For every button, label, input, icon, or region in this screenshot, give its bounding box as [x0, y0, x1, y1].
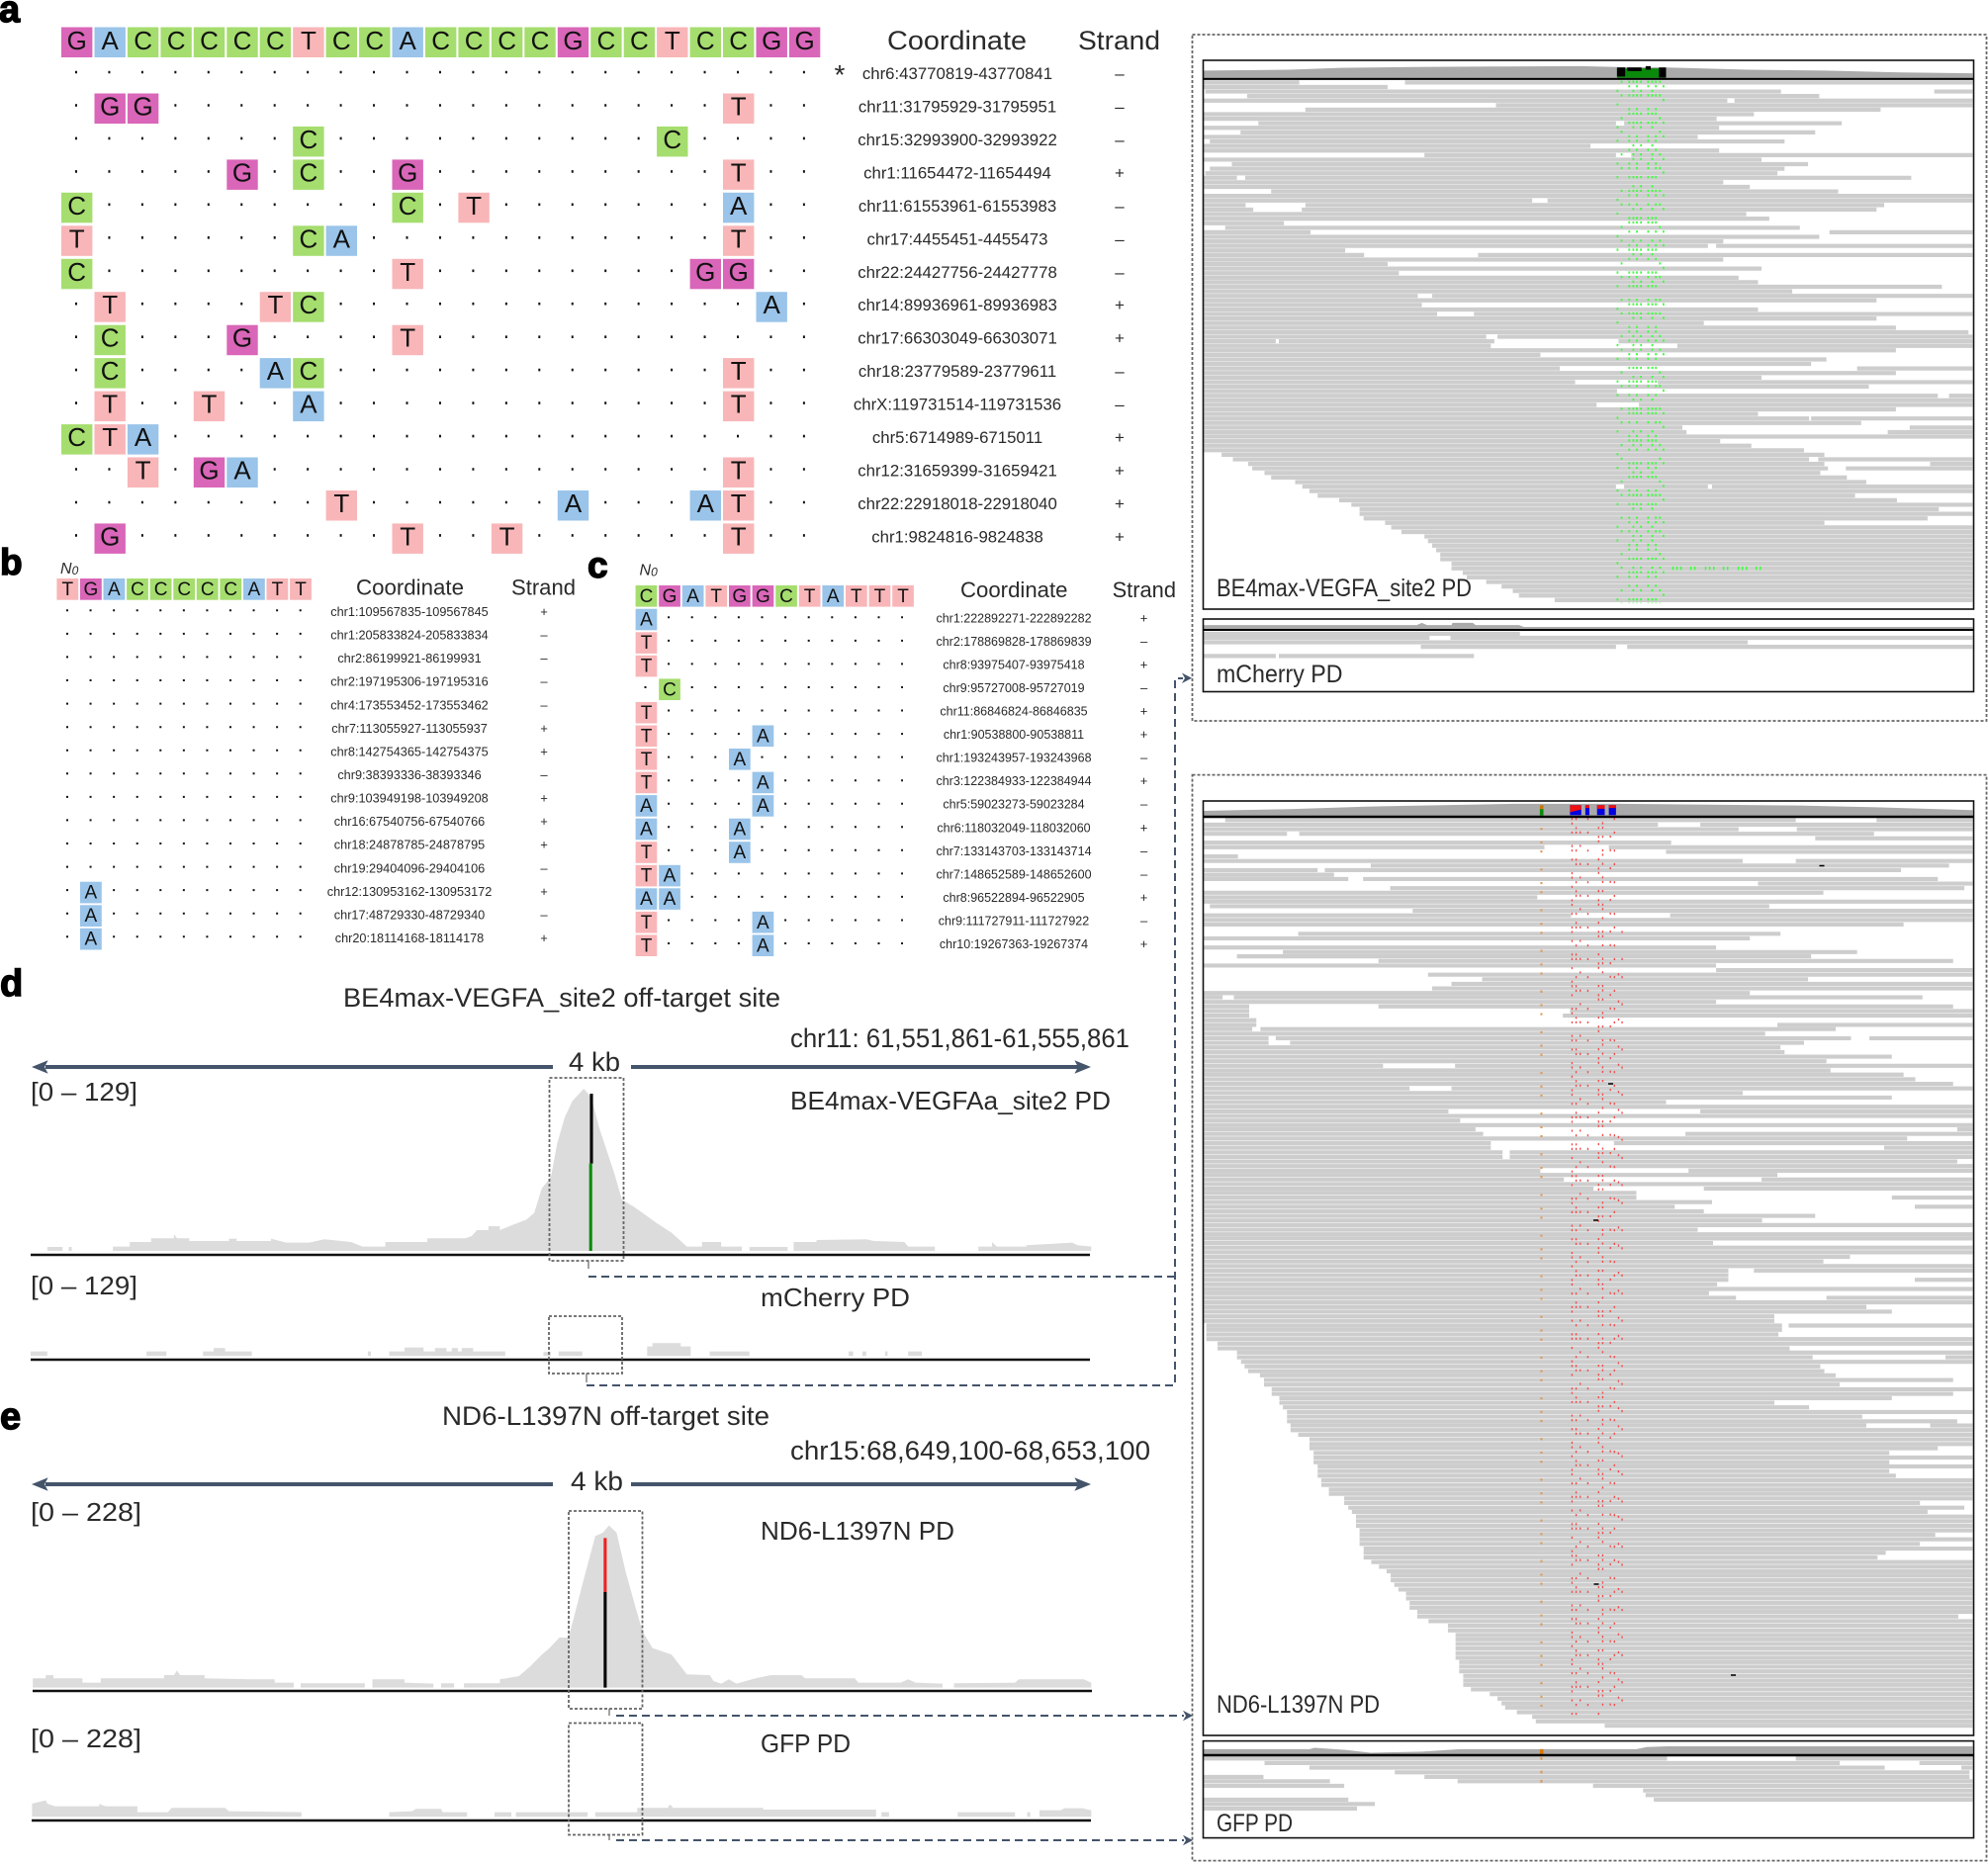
reads	[1204, 623, 1972, 656]
mismatch cells c: AA	[640, 796, 769, 817]
strand column c: +	[1140, 936, 1147, 951]
N0 label c: N	[639, 563, 651, 579]
strand column c: –	[1140, 914, 1148, 928]
strand column b: –	[540, 907, 548, 922]
column headings c: Coordinate	[960, 577, 1068, 602]
coordinates column c: chr9:111727911-111727922	[939, 914, 1089, 928]
reads lower	[1204, 1307, 1972, 1726]
coordinates column b: chr9:38393336-38393346	[337, 768, 482, 782]
scale arrow d	[32, 1047, 1091, 1077]
strand column a: –	[1115, 263, 1125, 282]
coordinates column c: chr5:59023273-59023284	[943, 798, 1085, 812]
guide sequence header a: GACCCCCTCCACCCCGCCTCCGG	[67, 26, 815, 55]
N0 label c: 0	[651, 566, 658, 579]
track name e1: ND6-L1397N PD	[761, 1516, 954, 1546]
strand column b: –	[540, 674, 548, 689]
mismatch cells b: A	[85, 930, 98, 950]
strand column a: +	[1115, 296, 1125, 314]
mismatch cells c: TA	[641, 773, 769, 793]
locus d: chr11: 61,551,861-61,555,861	[790, 1023, 1130, 1053]
coordinates column b: chr18:24878785-24878795	[334, 839, 485, 852]
strand column c: –	[1140, 680, 1148, 695]
label: ND6-L1397N PD	[1217, 1691, 1380, 1719]
header sequence c: CGATGGCTATTT	[640, 586, 909, 607]
highlight box e2	[569, 1723, 643, 1835]
strand column a: +	[1115, 494, 1125, 513]
dots matrix a	[75, 72, 821, 535]
coordinates column b: chr7:113055927-113055937	[331, 722, 488, 736]
dashed frame: BE4max read pileups	[1193, 35, 1986, 721]
range label e2: [0 – 228]	[31, 1724, 141, 1753]
coordinates column c: chr1:90538800-90538811	[944, 728, 1084, 742]
mismatch cells a: TTCA	[102, 290, 781, 319]
coordinates column b: chr1:109567835-109567845	[330, 605, 489, 619]
mismatch cells c: TA	[641, 913, 769, 933]
mismatch cells a: GGT	[100, 91, 747, 121]
coordinates column c: chr7:148652589-148652600	[936, 867, 1092, 881]
mismatch cells c: A	[640, 610, 653, 631]
strand column c: –	[1140, 751, 1148, 765]
green mismatch marks	[1629, 81, 1656, 603]
coordinates column c: chr1:193243957-193243968	[936, 752, 1092, 765]
pileup: BE4max-VEGFA_site2 PD	[1203, 60, 1974, 609]
coordinates column b: chr20:18114168-18114178	[335, 932, 484, 945]
locus e: chr15:68,649,100-68,653,100	[790, 1436, 1150, 1465]
strand column a: +	[1115, 163, 1125, 182]
coordinates column a: chr5:6714989-6715011	[872, 428, 1042, 447]
mismatch cells a: CTA	[67, 422, 152, 452]
coordinates column b: chr17:48729330-48729340	[334, 908, 485, 922]
dots matrix c	[645, 617, 903, 943]
column headings a: Strand	[1078, 26, 1160, 55]
mismatch cells b: A	[85, 883, 98, 904]
coordinates column b	[327, 605, 492, 945]
strand column b: –	[540, 860, 548, 875]
coordinates column b: chr16:67540756-67540766	[334, 815, 485, 829]
coverage track	[1204, 804, 1972, 816]
scale arrow e	[32, 1466, 1091, 1496]
strand column c: +	[1140, 704, 1147, 718]
strand column b: +	[540, 814, 548, 829]
coordinates column b: chr8:142754365-142754375	[330, 745, 489, 758]
mismatch cells c: TA	[641, 750, 746, 770]
coordinates column b: chr9:103949198-103949208	[330, 792, 489, 806]
strand column a: +	[1115, 527, 1125, 546]
strand column a: –	[1115, 64, 1125, 83]
strand column b: –	[540, 767, 548, 782]
strand column a: –	[1115, 229, 1125, 248]
column headings a	[887, 26, 1160, 55]
coordinates column c	[936, 611, 1092, 951]
strand column c: –	[1140, 866, 1148, 881]
strand column a: +	[1115, 461, 1125, 481]
strand column c: +	[1140, 657, 1147, 671]
strand column c	[1140, 610, 1148, 951]
range label d2: [0 – 129]	[31, 1271, 137, 1300]
track name d2: mCherry PD	[761, 1283, 910, 1312]
column headings a: Coordinate	[887, 26, 1027, 55]
coordinates column c: chr8:96522894-96522905	[943, 891, 1085, 905]
coordinates column c: chr7:133143703-133143714	[936, 844, 1092, 858]
highlight box d2	[549, 1316, 622, 1374]
mismatch cells c: T	[641, 633, 653, 654]
frame and axis	[1203, 801, 1974, 1735]
coverage histogram d2	[31, 1343, 922, 1356]
strand column a: –	[1115, 197, 1125, 216]
highlight box e1	[569, 1511, 643, 1709]
scale arrow e: 4 kb	[571, 1466, 623, 1496]
strand column c: +	[1140, 773, 1147, 788]
strand column c: +	[1140, 727, 1147, 742]
mismatch cells a: CTGG	[67, 257, 749, 287]
strand column c: +	[1140, 820, 1147, 835]
panel b: 11-nt alignment	[0, 542, 576, 950]
strand column c: –	[1140, 843, 1148, 858]
mismatch cells b	[80, 882, 102, 950]
column headings c	[960, 577, 1176, 602]
coordinates column c: chr2:178869828-178869839	[936, 635, 1092, 649]
coordinates column a: chr12:31659399-31659421	[858, 461, 1057, 481]
coordinates column a	[854, 64, 1061, 546]
panel a: VEGFA site 2 alignment	[0, 0, 1160, 554]
strand column b	[540, 604, 548, 945]
N0 label b: 0	[72, 564, 79, 577]
highlight box d1	[550, 1078, 623, 1261]
coordinates column b: chr2:86199921-86199931	[337, 652, 482, 665]
on-target asterisk: *	[835, 59, 846, 90]
range label d1: [0 – 129]	[31, 1077, 137, 1107]
coordinates column a: chr11:31795929-31795951	[858, 97, 1056, 117]
coordinates column a: chr1:11654472-11654494	[863, 163, 1051, 182]
pileup: mCherry PD	[1203, 619, 1974, 692]
mismatch cells a: CC	[300, 125, 681, 154]
coordinates column c: chr3:122384933-122384944	[936, 774, 1092, 788]
mismatch cells a: TAAT	[333, 488, 747, 518]
reads upper	[1204, 804, 1972, 1307]
strand column a	[1115, 64, 1125, 546]
mismatch cells a: TTAT	[102, 390, 747, 419]
coordinates column b: chr1:205833824-205833834	[330, 629, 489, 643]
frame and axis	[1203, 619, 1974, 692]
track name e2: GFP PD	[761, 1729, 851, 1758]
baseline e2	[32, 1819, 1091, 1821]
panel e: ND6 coverage tracks	[0, 1396, 1150, 1835]
strand column a: –	[1115, 396, 1125, 414]
coordinates column a: chr6:43770819-43770841	[862, 64, 1052, 83]
label: mCherry PD	[1217, 661, 1343, 688]
reads	[1204, 1746, 1972, 1809]
coordinates column a: chr15:32993900-32993922	[858, 131, 1057, 149]
N0 label b: N	[60, 561, 72, 577]
coordinates column c: chr8:93975407-93975418	[943, 658, 1085, 671]
title e: ND6-L1397N off-target site	[442, 1401, 769, 1431]
mismatch cells c: TA	[641, 726, 769, 747]
coordinates column a: chr22:24427756-24427778	[858, 263, 1057, 282]
coordinates column b: chr19:29404096-29404106	[334, 861, 485, 875]
strand column b: +	[540, 791, 548, 806]
panel d: BE4max coverage tracks	[0, 963, 1130, 1374]
mismatch cells a: CACT	[101, 356, 747, 386]
panel label c: c	[587, 545, 608, 585]
frame and axis	[1203, 60, 1974, 609]
strand column b: +	[540, 838, 548, 852]
strand column a: –	[1115, 362, 1125, 381]
mismatch cells a: TGAT	[136, 455, 747, 485]
mismatch cells a: CCTA	[67, 191, 748, 221]
mismatch cells b: A	[85, 906, 98, 927]
coordinates column a: chr18:23779589-23779611	[858, 362, 1056, 381]
coordinates column a: chr17:66303049-66303071	[858, 329, 1057, 348]
coordinates column c: chr10:19267363-19267374	[940, 937, 1088, 951]
baseline d1	[31, 1254, 1090, 1256]
column headings b: Coordinate	[356, 576, 464, 600]
mismatch cells c: C	[663, 679, 677, 700]
strand column a: –	[1115, 97, 1125, 117]
coordinates column c: chr9:95727008-95727019	[943, 681, 1085, 695]
red mismatch marks	[1541, 818, 1622, 1715]
coordinates column a: chr22:22918018-22918040	[858, 494, 1057, 513]
strand column b: +	[540, 721, 548, 736]
mismatch cells a	[61, 91, 787, 554]
strand column b: –	[540, 628, 548, 643]
coordinates column a: chr14:89936961-89936983	[858, 296, 1057, 314]
mismatch cells a: CGT	[101, 323, 415, 353]
reads	[1204, 66, 1972, 603]
coordinates column c: chr6:118032049-118032060	[937, 821, 1091, 835]
strand column a: –	[1115, 131, 1125, 149]
coverage histogram e2	[32, 1801, 1091, 1817]
strand column a: +	[1115, 428, 1125, 447]
connector arrows d to reads	[587, 672, 1192, 1385]
coordinates column c: chr1:222892271-222892282	[936, 611, 1092, 625]
frame and axis	[1203, 1741, 1974, 1838]
small insertion marks	[1593, 866, 1824, 1675]
title d: BE4max-VEGFA_site2 off-target site	[343, 983, 780, 1013]
strand column b: +	[540, 744, 548, 758]
strand column b: –	[540, 697, 548, 712]
mismatch cells c: T	[641, 657, 653, 677]
header sequence b: TGACCCCCATT	[61, 579, 307, 600]
panel c: 12-nt alignment	[587, 545, 1176, 956]
baseline d2	[31, 1359, 1090, 1361]
coordinates column a: chr17:4455451-4455473	[867, 229, 1047, 248]
dots matrix b	[66, 610, 302, 936]
range label e1: [0 – 228]	[31, 1497, 141, 1527]
strand column c: –	[1140, 634, 1148, 649]
scale arrow d: 4 kb	[569, 1047, 620, 1077]
coverage histogram e1	[33, 1526, 1091, 1688]
track name d1: BE4max-VEGFAa_site2 PD	[790, 1086, 1111, 1115]
mismatch cells a: GCGT	[232, 157, 747, 187]
coordinates column a: chrX:119731514-119731536	[854, 396, 1061, 414]
strand column c: +	[1140, 890, 1147, 905]
mismatch cells c	[636, 609, 773, 956]
strand column b: +	[540, 931, 548, 945]
mismatch cells c: TA	[641, 843, 746, 863]
strand column a: +	[1115, 329, 1125, 348]
connector arrows e to reads	[609, 1709, 1193, 1845]
coverage track	[1204, 66, 1972, 78]
mismatch cells c: AA	[640, 820, 746, 841]
panel label b: b	[0, 542, 23, 582]
mismatch cells c: TA	[641, 935, 769, 956]
mismatch cells a: TCAT	[69, 223, 747, 253]
coordinates column b: chr2:197195306-197195316	[330, 675, 489, 689]
label: GFP PD	[1217, 1810, 1293, 1837]
strand column b: –	[540, 651, 548, 665]
panel label e: e	[0, 1396, 21, 1438]
label: BE4max-VEGFA_site2 PD	[1217, 575, 1472, 602]
column headings c: Strand	[1113, 577, 1176, 602]
strand column b: +	[540, 604, 548, 619]
coverage histogram d1	[47, 1089, 1091, 1251]
coordinates column b: chr12:130953162-130953172	[327, 885, 492, 899]
baseline e1	[33, 1690, 1092, 1692]
panel label d: d	[0, 963, 23, 1005]
strand column b: +	[540, 884, 548, 899]
dashed frame: ND6 read pileups	[1193, 775, 1986, 1861]
column headings b: Strand	[511, 576, 576, 600]
coordinates column a: chr11:61553961-61553983	[858, 197, 1056, 216]
coordinates column c: chr11:86846824-86846835	[940, 704, 1088, 718]
column headings b	[356, 576, 576, 600]
pileup: GFP PD	[1203, 1741, 1974, 1838]
mismatch cells c: TA	[641, 866, 677, 887]
coordinates column a: chr1:9824816-9824838	[871, 527, 1043, 546]
mismatch cells a: GTTT	[100, 521, 747, 551]
pileup: ND6-L1397N PD	[1203, 801, 1974, 1735]
coordinates column b: chr4:173553452-173553462	[330, 698, 489, 712]
strand column c: +	[1140, 610, 1147, 625]
mismatch cells c: T	[641, 703, 653, 724]
strand column c: –	[1140, 797, 1148, 812]
mismatch cells c: AA	[640, 889, 677, 910]
